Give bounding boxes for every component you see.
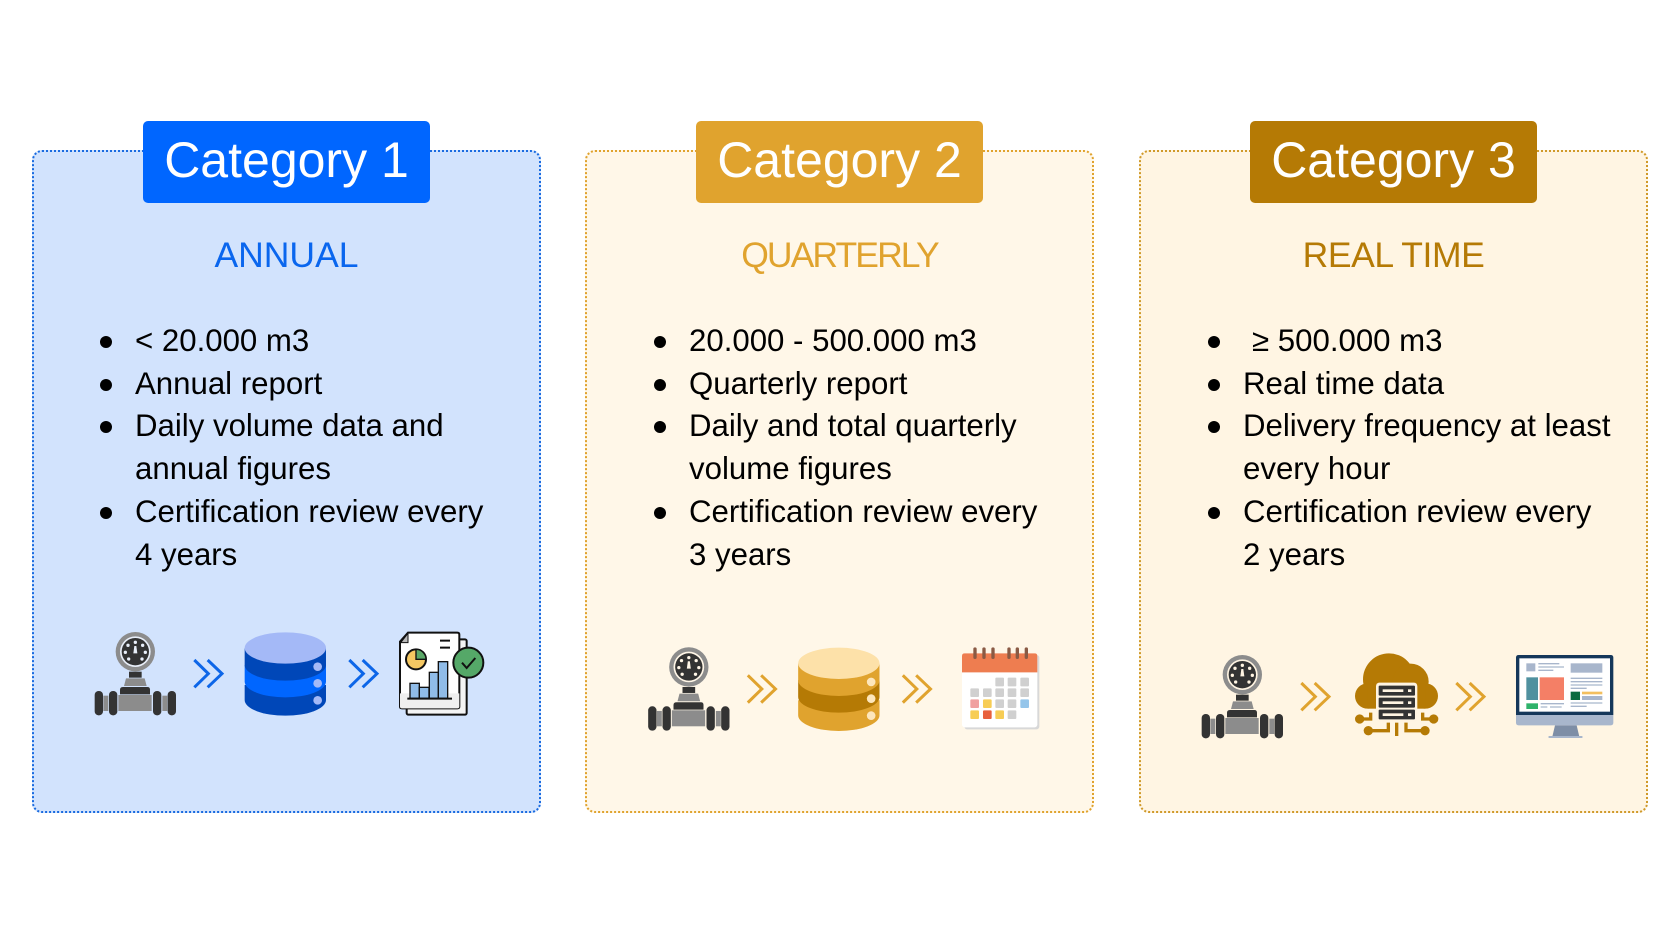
icon: flow meter [1202,655,1283,738]
subheading: annual: ANNUAL [214,235,358,275]
arrow: meter to database [194,660,222,687]
icon: database [798,648,879,731]
bullet list: category 3 requirements [1208,323,1610,572]
heading: Category 3: Category 3 [1271,132,1516,188]
bullet list: category 2 requirements: Daily and total quarterly [689,408,1017,443]
bullet list: category 2 requirements: volume figures [689,451,892,486]
heading: Category 1 [143,121,430,203]
heading: Category 2: Category 2 [717,132,962,188]
bullet list: category 1 requirements: 4 years [135,537,237,572]
arrow: cloud to dashboard [1456,683,1484,710]
bullet list: category 3 requirements: Real time data [1243,366,1444,401]
subheading: real time: REAL TIME [1303,235,1484,275]
icon: database [245,632,326,716]
bullet list: category 3 requirements: 2 years [1243,537,1345,572]
bullet list: category 2 requirements [654,323,1038,572]
icon: report with chart [400,633,483,715]
arrow: meter to cloud [1301,683,1329,710]
bullet list: category 1 requirements: annual figures [135,451,331,486]
subheading: quarterly: QUARTERLY [741,235,938,275]
flow diagram: meter to cloud to dashboard [1202,653,1614,738]
flow diagram: meter to database to calendar [648,647,1040,731]
heading: Category 2 [696,121,983,203]
bullet list: category 2 requirements: 3 years [689,537,791,572]
icon: flow meter [648,647,729,731]
icon: cloud server [1355,653,1438,736]
bullet list: category 1 requirements: Daily volume data and [135,408,444,443]
icon: calendar [962,649,1039,729]
bullet list: category 3 requirements: Delivery frequency at least [1243,408,1610,443]
icon: flow meter [95,632,176,715]
bullet list: category 1 requirements: < 20.000 m3 [135,323,309,358]
bullet list: category 1 requirements: Certification review every [135,494,483,529]
heading: Category 1: Category 1 [164,132,409,188]
arrow: meter to database [748,675,775,703]
bullet list: category 1 requirements: Annual report [135,366,322,401]
panel: category 2 [585,121,1094,813]
bullet list: category 2 requirements: 20.000 - 500.000 m3 [689,323,977,358]
bullet list: category 3 requirements: every hour [1243,451,1390,486]
panel: category 1 [32,121,541,813]
icon: dashboard monitor [1516,655,1613,738]
bullet list: category 2 requirements: Certification review every [689,494,1037,529]
bullet list: category 3 requirements: ≥ 500.000 m3 [1252,323,1443,358]
flow diagram: meter to database to report [94,632,484,716]
arrow: database to report [349,660,377,687]
bullet list: category 1 requirements [100,323,484,572]
panel: category 3 [1139,121,1648,813]
arrow: database to calendar [903,675,930,703]
bullet list: category 3 requirements: Certification review every [1243,494,1591,529]
heading: Category 3 [1250,121,1537,203]
bullet list: category 2 requirements: Quarterly report [689,366,907,401]
